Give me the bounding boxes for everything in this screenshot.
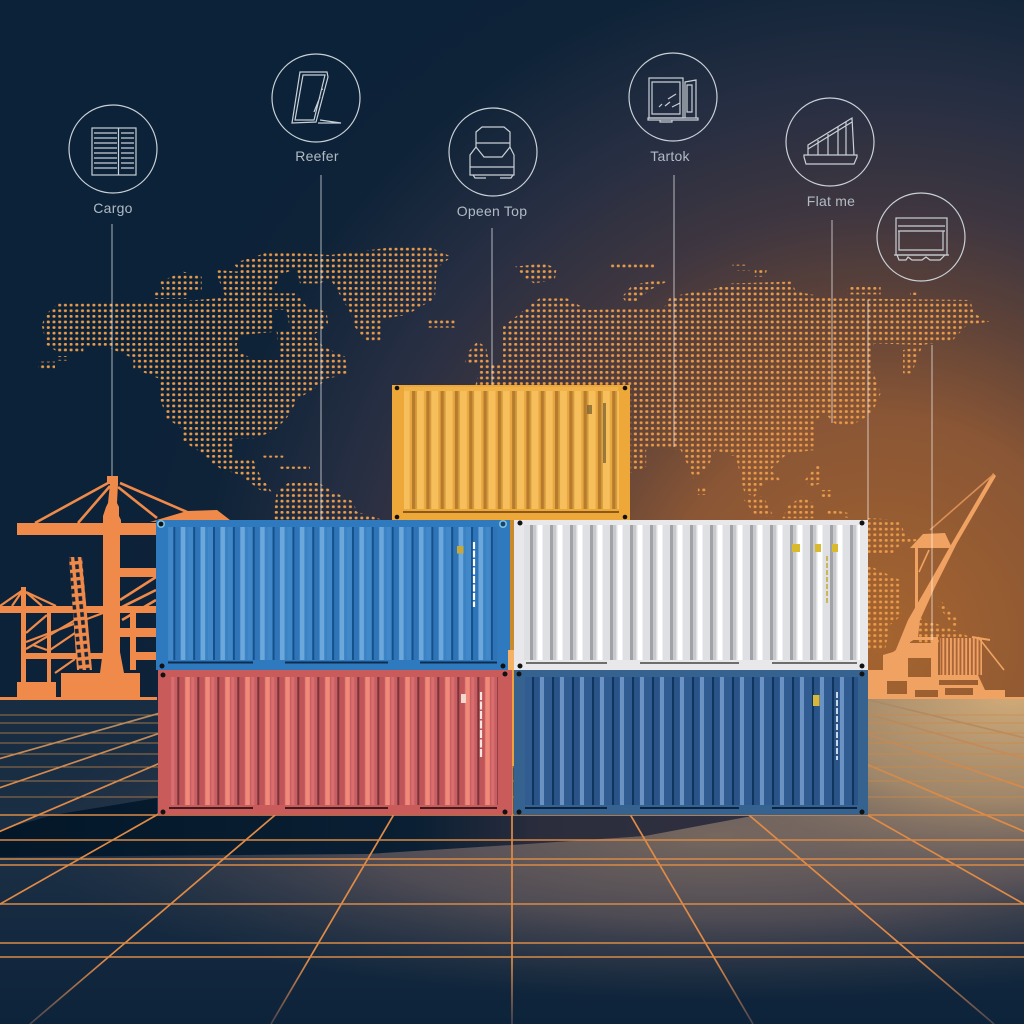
- item: flat rack: [786, 98, 874, 209]
- item: unlabelled type: [877, 193, 965, 281]
- container shadow: [0, 798, 752, 857]
- ground plane: [0, 697, 1024, 1024]
- main crane: [0, 476, 230, 697]
- world map dots: [38, 248, 990, 648]
- container: red: [158, 670, 512, 815]
- item: open top: [449, 108, 537, 219]
- container: blue: [156, 520, 510, 670]
- container: yellow: [392, 385, 630, 520]
- icon: flat rack: [804, 118, 857, 164]
- label: reefer: Reefer: [295, 148, 339, 164]
- item: cargo: [69, 105, 157, 216]
- label: flat rack: Flat me: [807, 193, 855, 209]
- perspective grid: [0, 704, 1024, 1024]
- icon: open top: [470, 127, 514, 178]
- icon: cargo container: [92, 128, 136, 175]
- right port crane: [868, 473, 1024, 699]
- icon: tartok: [648, 78, 698, 122]
- centre gap strip: [508, 520, 514, 766]
- crane ground strip: [0, 697, 157, 700]
- icon: tank frame: [894, 218, 949, 260]
- connector lines: [112, 175, 932, 640]
- secondary crane: [0, 587, 103, 697]
- label: cargo: Cargo: [93, 200, 133, 216]
- container: navy: [514, 670, 868, 815]
- label: tartok: Tartok: [650, 148, 691, 164]
- icon: reefer: [292, 72, 341, 123]
- item: tartok: [629, 53, 717, 164]
- item: reefer: [272, 54, 360, 164]
- container: white: [514, 520, 868, 670]
- left port cranes: [0, 476, 230, 700]
- lattice tower: [69, 557, 92, 670]
- label: open top: Opeen Top: [457, 203, 527, 219]
